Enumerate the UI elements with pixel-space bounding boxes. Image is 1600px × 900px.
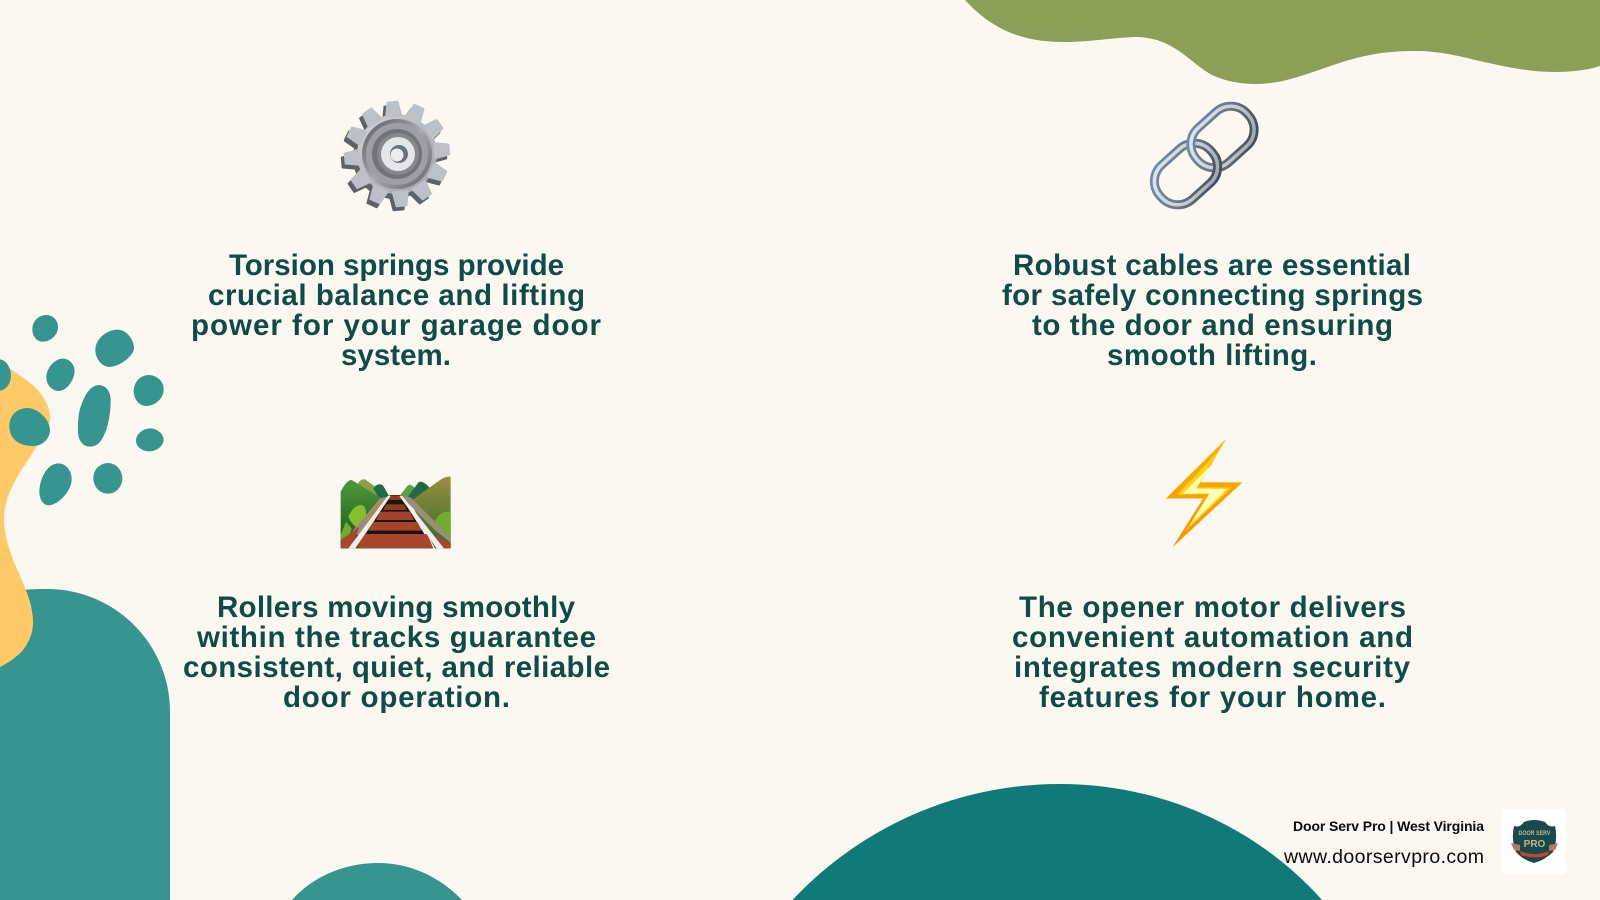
text: rollers [183, 591, 610, 714]
text: torsion springs: power for your garage door [191, 309, 602, 342]
panel: rollers and tracks [183, 477, 610, 714]
text: opener motor: convenient automation and [1012, 621, 1413, 654]
logo [1501, 809, 1566, 874]
text: cables: to the door and ensuring [1032, 309, 1393, 342]
icon: lightning bolt [1166, 439, 1242, 547]
text: torsion springs: Torsion springs provide [229, 249, 564, 282]
text: cables: smooth lifting. [1107, 339, 1317, 372]
logo: DOOR SERV [1518, 830, 1551, 837]
decorative teal dots [0, 315, 164, 505]
decorative teal arch, bottom left [0, 589, 170, 900]
icon: gear [342, 102, 449, 210]
decorative yellow blob, left edge [0, 359, 50, 667]
logo: PRO [1524, 839, 1546, 850]
panel: cables [1002, 97, 1423, 372]
text: torsion springs: crucial balance and lifting [208, 279, 585, 312]
text: cables [1002, 249, 1423, 372]
text: torsion springs: system. [341, 339, 451, 372]
text: torsion springs [191, 249, 602, 372]
text: rollers: consistent, quiet, and reliable [183, 651, 610, 684]
text: rollers: within the tracks guarantee [196, 621, 596, 654]
decorative green wave, top right [965, 0, 1600, 84]
decorative teal dome, bottom centre [292, 863, 462, 900]
website: www.doorservpro.com [1283, 846, 1484, 868]
footer branding [1283, 809, 1566, 874]
panel: opener motor [1012, 439, 1413, 714]
text: rollers: Rollers moving smoothly [217, 591, 576, 624]
text: cables: for safely connecting springs [1002, 279, 1423, 312]
decorative dark teal dome, bottom right [792, 784, 1322, 900]
panel: torsion springs [191, 102, 602, 372]
text: opener motor: The opener motor delivers [1019, 591, 1406, 624]
text: rollers: door operation. [283, 681, 510, 714]
text: opener motor [1012, 591, 1413, 714]
text: cables: Robust cables are essential [1013, 249, 1411, 282]
icon: railway track [341, 477, 451, 548]
text: opener motor: integrates modern security [1014, 651, 1411, 684]
text: opener motor: features for your home. [1039, 681, 1386, 714]
company name: Door Serv Pro | West Virginia [1293, 818, 1484, 834]
icon: chain links [1150, 102, 1259, 210]
